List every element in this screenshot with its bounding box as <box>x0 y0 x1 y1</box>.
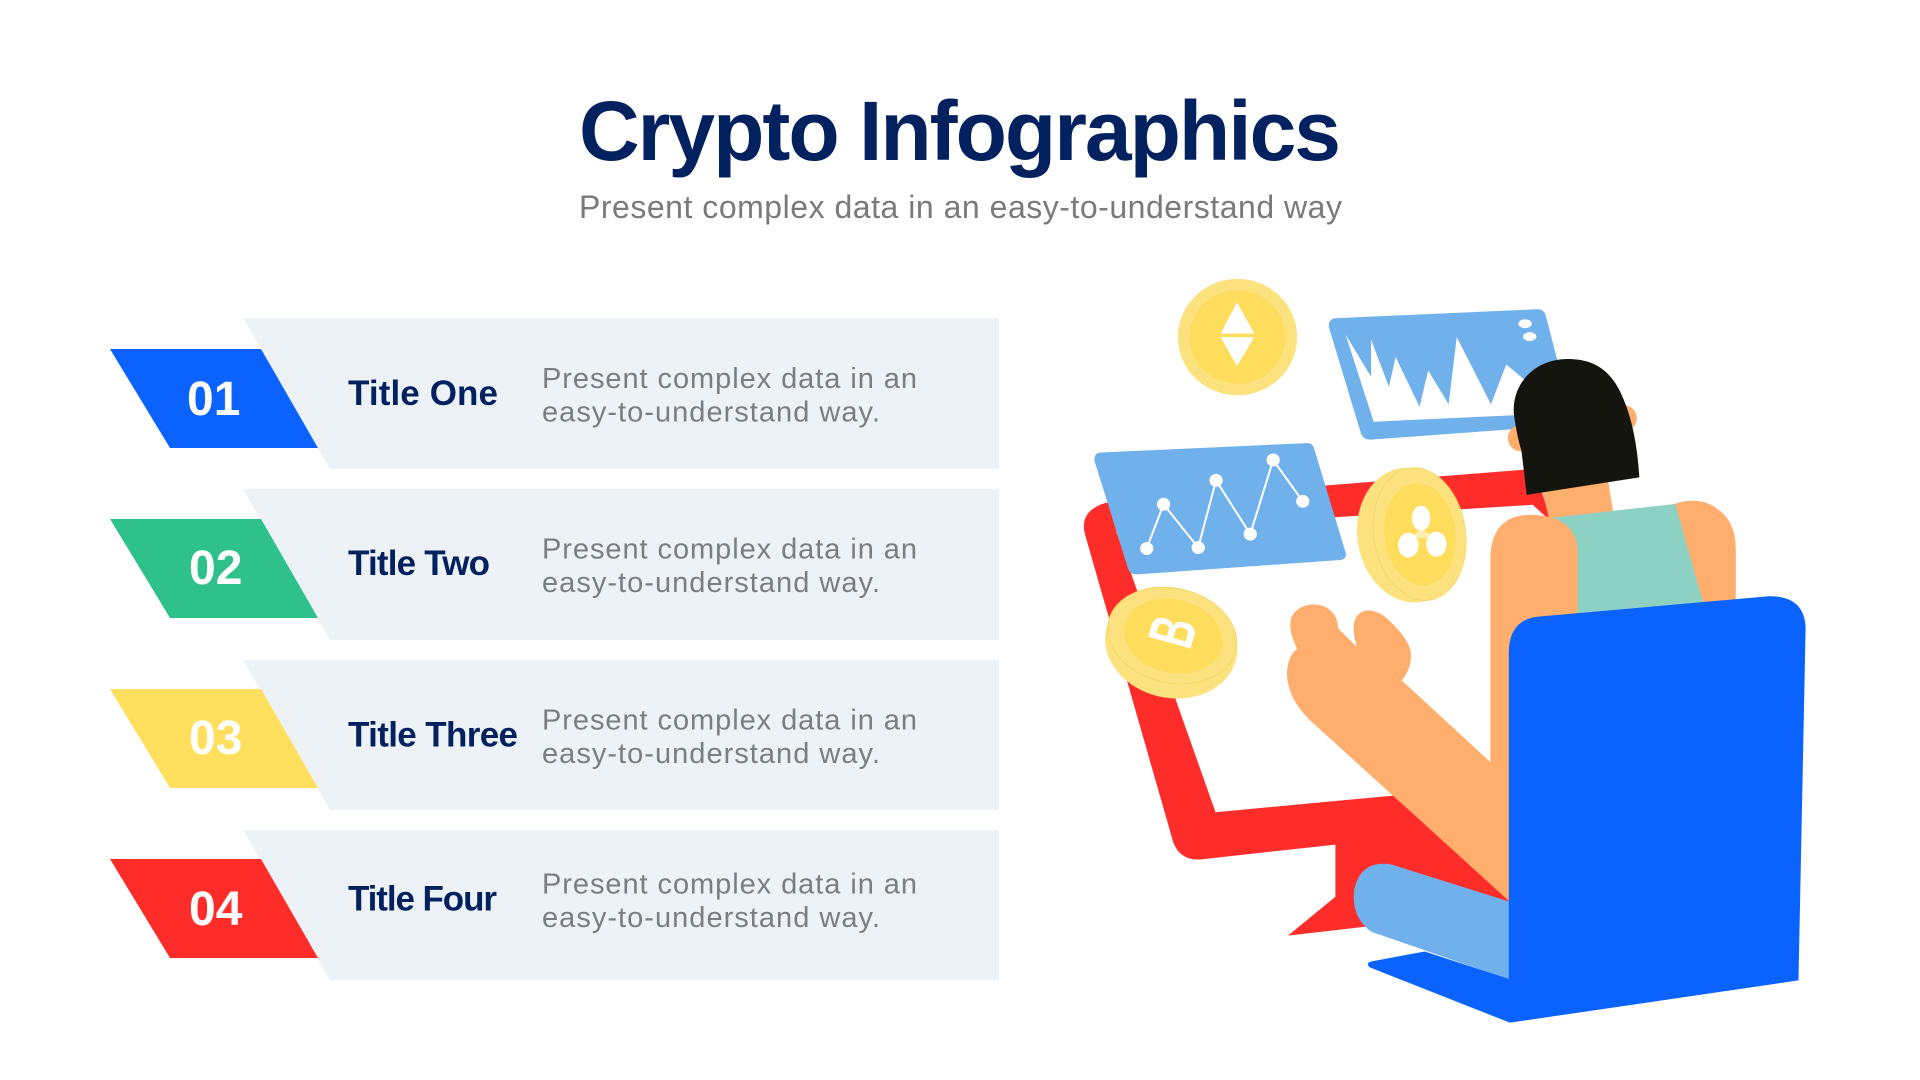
heading: Title Three: Title Three <box>348 716 518 754</box>
neck <box>1542 481 1613 521</box>
description: easy-to-understand way. <box>542 902 880 934</box>
description: easy-to-understand way. <box>542 396 880 428</box>
panel background <box>243 489 999 640</box>
icon: bitcoin coin <box>1093 574 1249 712</box>
panel background <box>243 830 999 980</box>
number badge 01 <box>110 349 318 448</box>
left upper arm <box>1490 515 1578 902</box>
number 02: 02 <box>189 542 242 595</box>
right arm <box>1675 501 1736 608</box>
icon: bitcoin coin: B <box>1135 609 1212 655</box>
description: easy-to-understand way. <box>542 738 880 770</box>
number 03: 03 <box>189 712 242 765</box>
panel: item 04 <box>110 830 999 980</box>
number badge 02 <box>110 519 318 618</box>
chair <box>1368 596 1806 1023</box>
panel background <box>243 318 999 469</box>
subtitle: Present complex data in an easy-to-understand way <box>579 189 1342 225</box>
panel: item 03 <box>110 660 999 810</box>
description <box>542 363 917 428</box>
ears <box>1508 425 1535 452</box>
panel: item 01 <box>110 318 999 469</box>
title: Crypto Infographics <box>579 84 1341 178</box>
monitor <box>1084 469 1552 936</box>
icon: ripple coin <box>1348 461 1475 609</box>
heading: Title One: Title One <box>348 374 498 413</box>
number badge 04 <box>110 859 318 958</box>
chart card: area chart <box>1329 309 1565 440</box>
number 01: 01 <box>187 373 240 426</box>
description: Present complex data in an <box>542 868 917 900</box>
leg <box>1354 864 1510 980</box>
panel background <box>243 660 999 810</box>
description: easy-to-understand way. <box>542 567 880 599</box>
person <box>1287 359 1736 980</box>
description: Present complex data in an <box>542 704 917 736</box>
heading: Title Two: Title Two <box>348 544 490 583</box>
number 04: 04 <box>189 883 243 936</box>
description: Present complex data in an <box>542 363 917 395</box>
forearm and hand <box>1287 605 1510 902</box>
icon: ethereum coin <box>1178 279 1297 395</box>
chart card: line chart <box>1094 443 1346 574</box>
tank top <box>1552 504 1705 621</box>
hair <box>1514 359 1639 495</box>
description <box>542 704 917 770</box>
heading: Title Four: Title Four <box>348 880 497 918</box>
illustration: person at crypto monitor <box>1084 279 1806 1023</box>
panel: item 02 <box>110 489 999 640</box>
description <box>542 534 917 599</box>
number badge 03 <box>110 689 318 788</box>
description: Present complex data in an <box>542 534 917 566</box>
description <box>542 868 917 934</box>
